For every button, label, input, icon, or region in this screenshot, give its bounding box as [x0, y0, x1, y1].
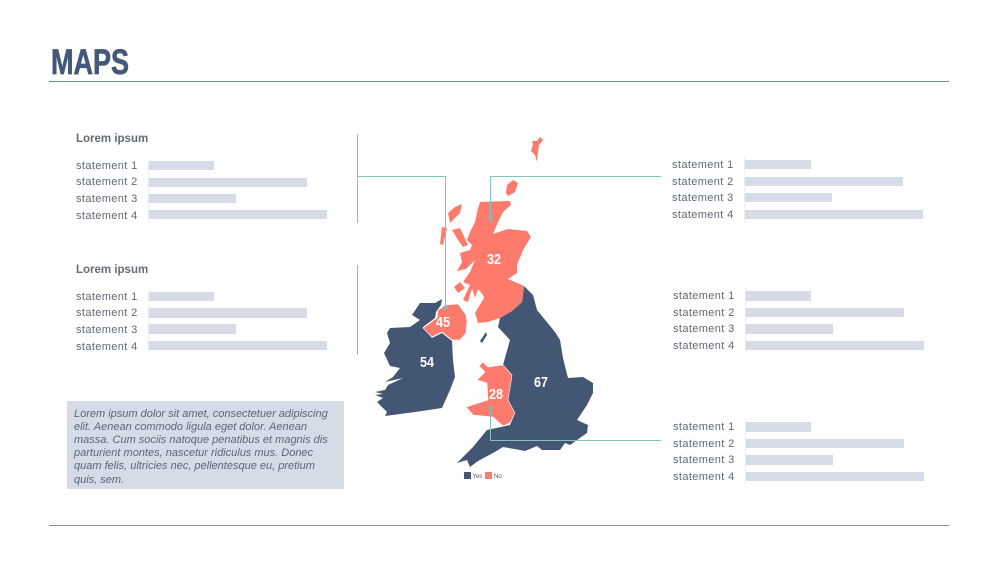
panel: right middle statements: statement 2	[673, 307, 735, 319]
legend	[464, 472, 502, 480]
legend: No	[494, 474, 502, 480]
legend: Yes	[472, 474, 482, 480]
panel: right bottom statements: statement 4	[673, 471, 735, 483]
panel: text callout: Lorem ipsum dolor sit amet, consectetuer adipiscing	[74, 408, 329, 420]
region: Skye	[452, 228, 468, 247]
bar chart: left middle: statement 1	[76, 291, 138, 303]
panel: right bottom statements: statement 2	[673, 438, 735, 450]
bar chart: left top: statement 2	[76, 176, 138, 188]
region: Wales	[466, 362, 515, 426]
panel: right top statements: statement 2	[672, 176, 734, 188]
value labels: 54	[420, 354, 435, 371]
bar chart: left middle: statement 4	[76, 341, 138, 353]
region: Arran and Bute	[454, 282, 465, 293]
panel: left middle statements	[76, 264, 327, 353]
panel: right bottom statements: statement 1	[673, 421, 735, 433]
bar chart: left top: statement 4	[76, 210, 138, 222]
region: Ireland	[375, 299, 455, 416]
value labels	[420, 251, 548, 403]
panel: right middle statements: statement 4	[673, 340, 735, 352]
heading: left middle: Lorem ipsum	[76, 264, 148, 276]
value labels: 28	[489, 386, 503, 403]
value labels: 67	[534, 374, 548, 391]
region: Uists	[440, 227, 447, 245]
bar chart: left middle: statement 2	[76, 307, 138, 319]
bar chart: left middle: statement 3	[76, 324, 138, 336]
region: Scotland	[457, 201, 531, 323]
connector: right top to Scotland	[488, 176, 661, 222]
panel: right top statements: statement 3	[672, 192, 734, 204]
panel: right bottom statements: statement 3	[673, 454, 735, 466]
panel: text callout	[67, 401, 344, 489]
panel: text callout: quis, sem.	[74, 474, 124, 486]
panel: right middle statements: statement 1	[673, 290, 735, 302]
region: Isle of Lewis	[448, 204, 462, 223]
value labels: 32	[487, 251, 501, 268]
value labels: 45	[436, 314, 450, 331]
map of UK and Ireland	[375, 137, 593, 480]
bar chart: left middle	[76, 289, 327, 353]
panel frame line: left top	[356, 134, 358, 223]
panel: right bottom statements	[673, 419, 924, 483]
panel: text callout: massa. Cum sociis natoque penatibus et magnis dis	[74, 434, 328, 446]
panel: left top statements	[76, 133, 327, 222]
region: Isle of Man	[480, 332, 487, 343]
header rule	[49, 80, 949, 82]
panel: right middle statements	[673, 288, 924, 352]
connector: right bottom to Wales	[488, 404, 661, 440]
panel: right top statements: statement 4	[672, 209, 734, 221]
panel: text callout: elit. Aenean commodo ligula eget dolor. Aenean	[74, 421, 307, 433]
footer rule	[49, 524, 949, 526]
bar chart: left top: statement 1	[76, 160, 138, 172]
panel: right middle statements: statement 3	[673, 323, 735, 335]
region: Shetland	[531, 137, 543, 162]
region: Orkney	[506, 180, 518, 196]
bar chart: left top	[76, 158, 327, 222]
panel: right top statements	[672, 157, 923, 221]
connector: left top to Northern Ireland	[358, 176, 448, 311]
panel frame line: left middle	[356, 265, 358, 355]
heading: left top: Lorem ipsum	[76, 133, 148, 145]
title: MAPS	[51, 43, 129, 82]
region: England	[457, 286, 593, 467]
panel: text callout: quam felis, ultricies nec, pellentesque eu, pretium	[74, 460, 315, 472]
region: Northern Ireland	[423, 304, 467, 340]
panel: text callout: parturient montes, nascetur ridiculus mus. Donec	[73, 447, 314, 459]
bar chart: left top: statement 3	[76, 193, 138, 205]
panel: right top statements: statement 1	[672, 159, 734, 171]
